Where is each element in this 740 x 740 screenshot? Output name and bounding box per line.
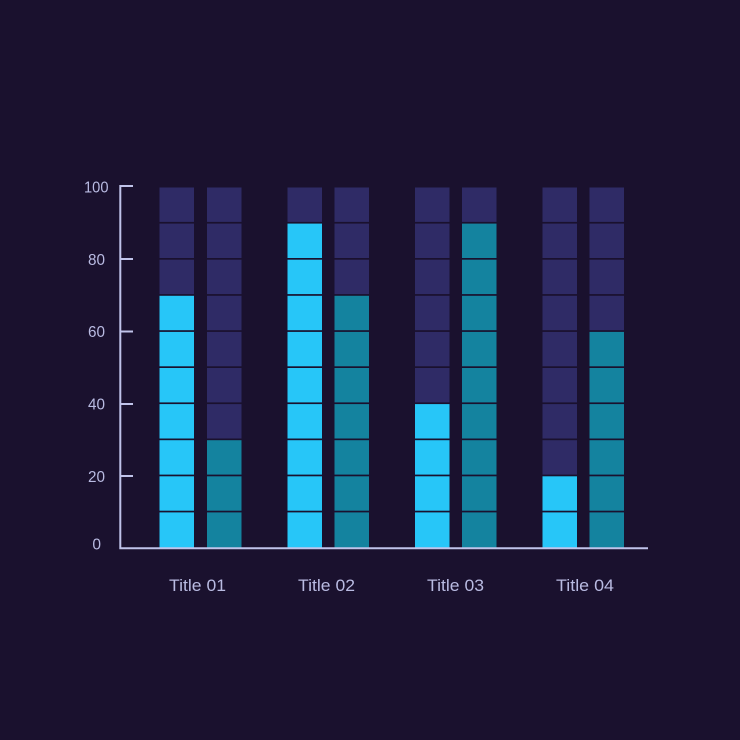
x axis category labels: Title 04 <box>556 576 614 595</box>
x axis category labels <box>169 576 614 595</box>
bars: Title 01 second series, value 30 <box>207 188 242 548</box>
bars: Title 02 first series, value 90 <box>288 188 322 548</box>
bars: Title 04 first series, value 20 <box>542 188 577 548</box>
x axis category labels: Title 02 <box>298 576 355 595</box>
bars: Title 03 first series, value 40 <box>415 188 450 548</box>
y axis labels: 40 <box>88 396 105 414</box>
x axis category labels: Title 03 <box>427 576 484 595</box>
y axis labels: 80 <box>88 252 105 269</box>
y axis labels <box>84 180 109 554</box>
bars: Title 01 first series, value 70 <box>160 188 194 548</box>
bars: Title 03 second series, value 90 <box>462 188 496 548</box>
bars: Title 02 second series, value 70 <box>334 188 369 548</box>
y axis labels: 100 <box>84 180 109 196</box>
y axis labels: 60 <box>88 324 105 341</box>
y axis labels: 20 <box>88 469 105 486</box>
x axis category labels: Title 01 <box>169 576 226 595</box>
bars: Title 04 second series, value 60 <box>590 188 624 548</box>
y axis labels: 0 <box>92 536 101 554</box>
chart axes with tick marks <box>120 186 648 548</box>
